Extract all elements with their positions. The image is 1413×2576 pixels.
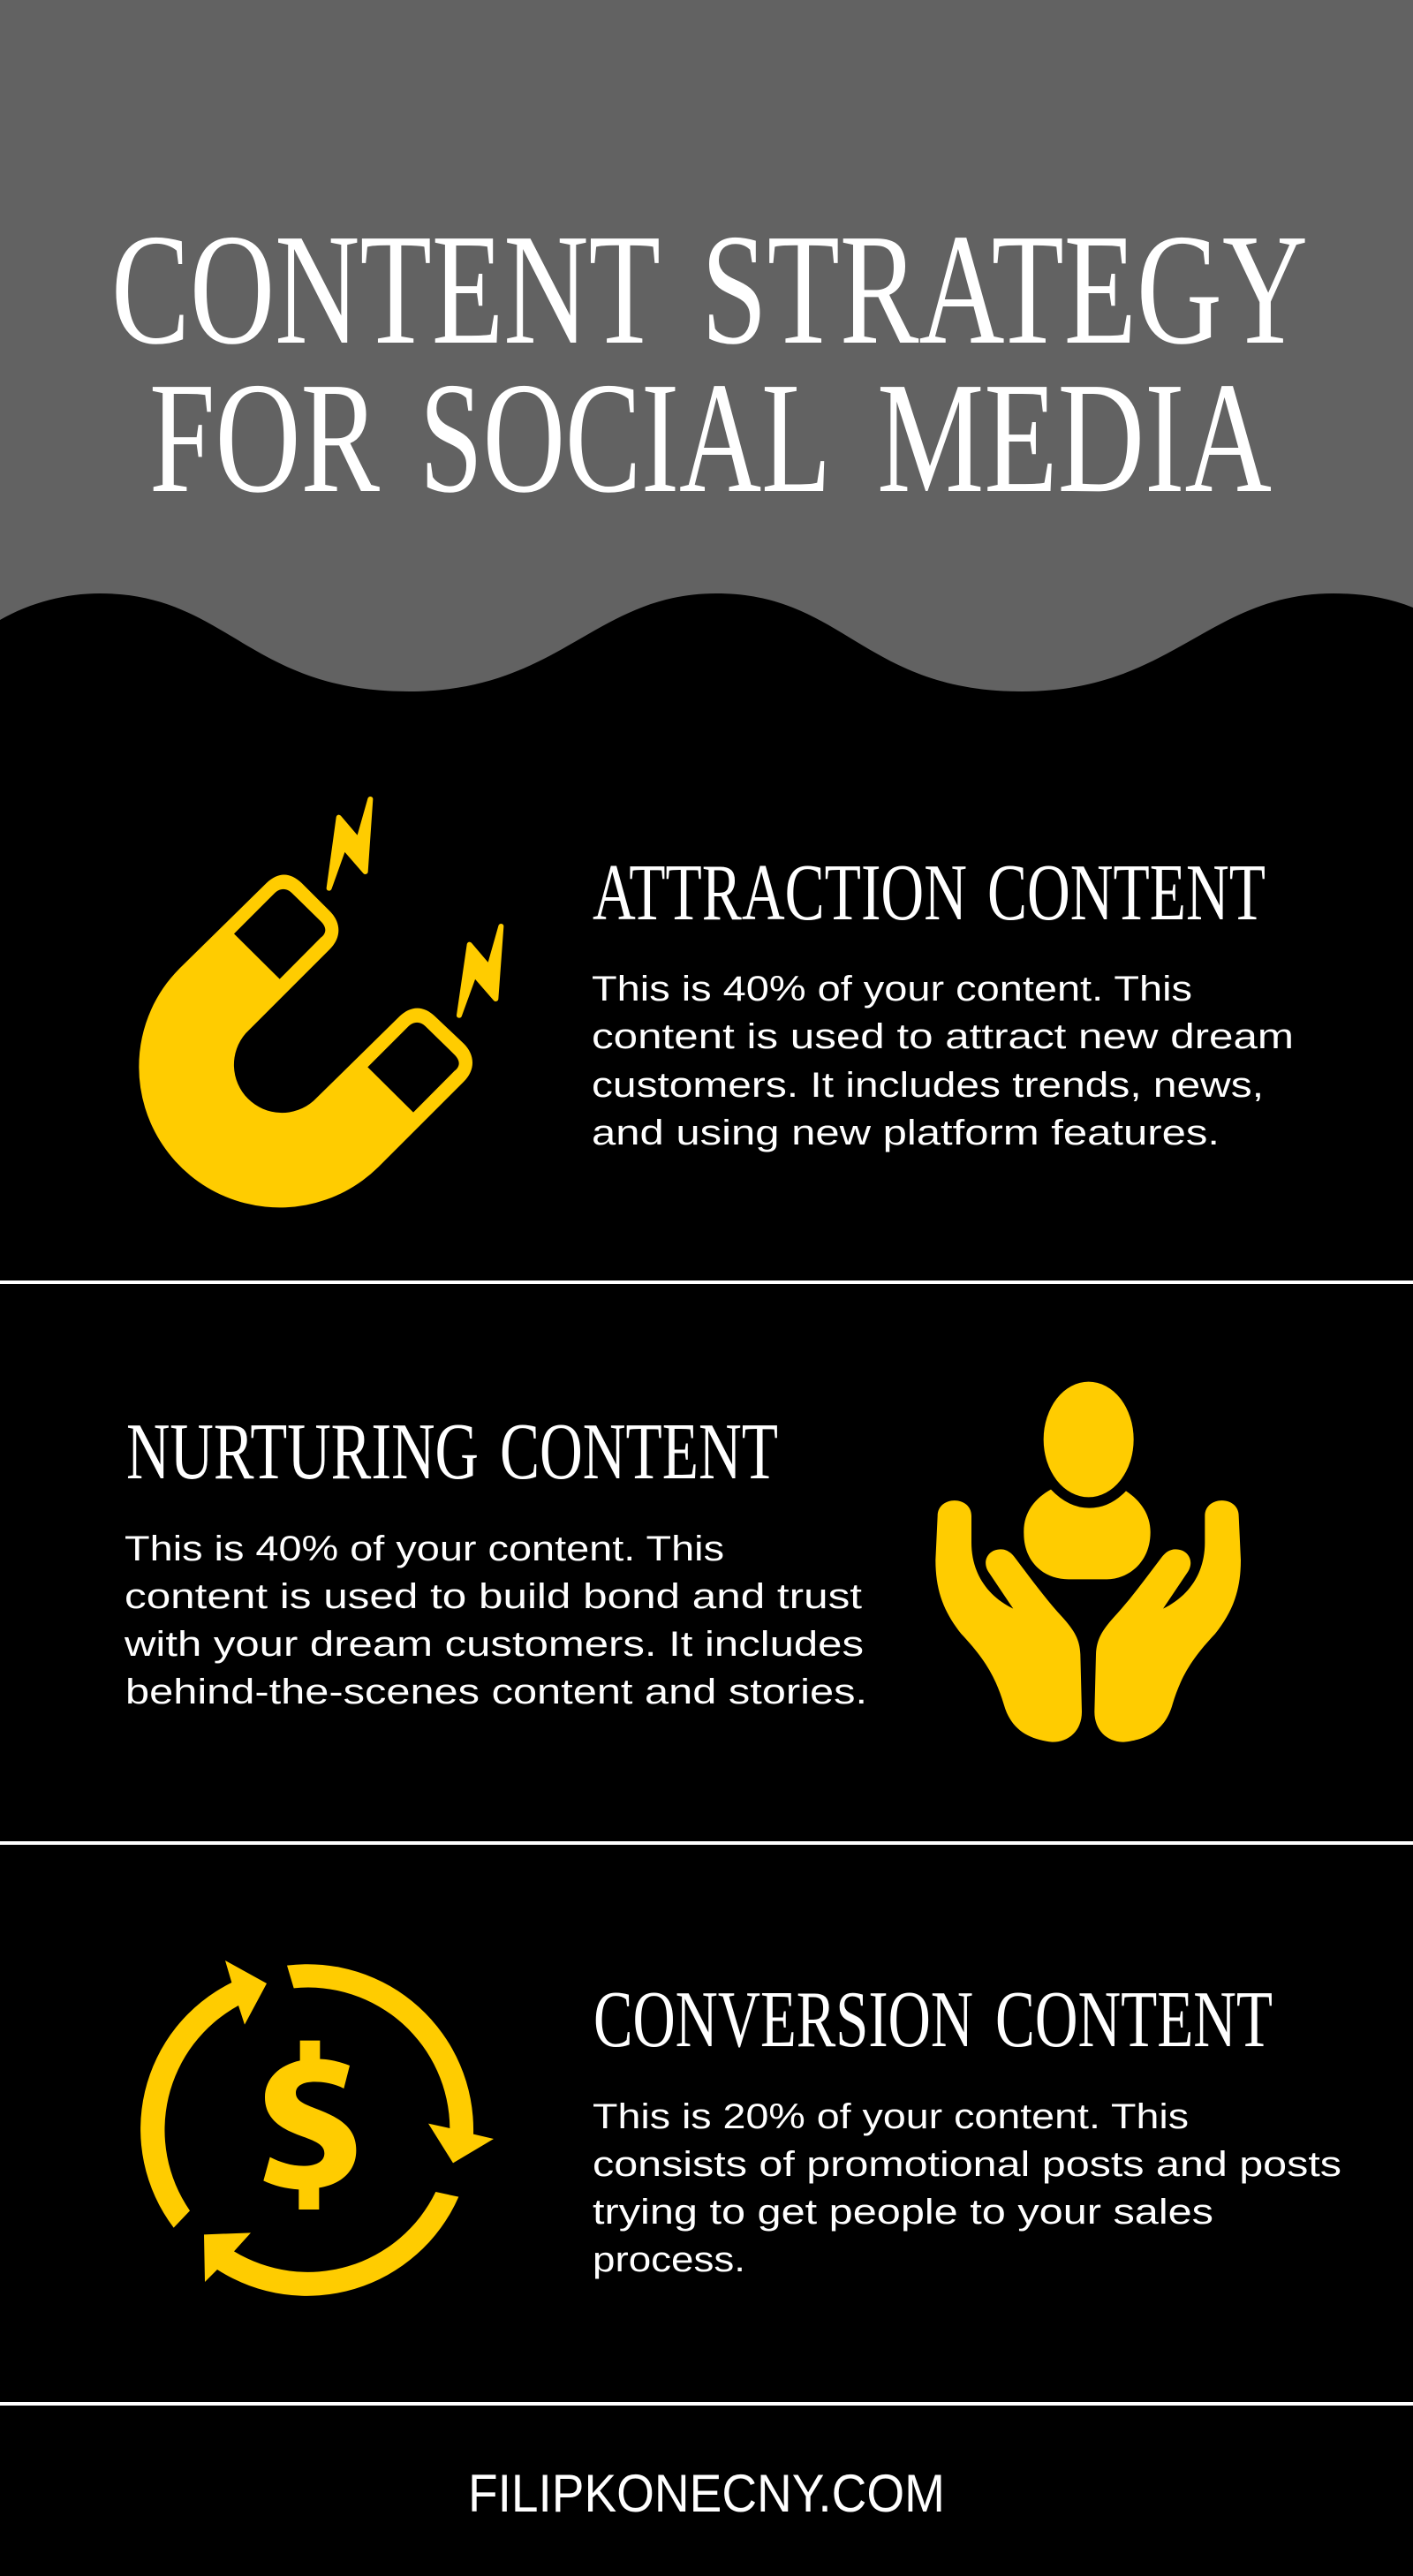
panel: nurturing content	[124, 1382, 1241, 1742]
heading: ATTRACTION	[593, 848, 967, 937]
body text: and using new platform features.	[592, 1114, 1220, 1152]
body text: customers. It includes trends, news,	[592, 1066, 1264, 1105]
icon: hands holding person	[935, 1382, 1241, 1742]
title: CONTENT	[111, 201, 661, 377]
header band	[0, 0, 1413, 706]
body text: This is 40% of your content. This	[125, 1530, 724, 1568]
body text: process.	[593, 2240, 745, 2279]
title: FOR	[149, 350, 380, 525]
heading: CONTENT	[500, 1407, 778, 1496]
body text: This is 20% of your content. This	[593, 2097, 1189, 2136]
body text	[593, 2097, 1341, 2279]
body text: with your dream customers. It includes	[124, 1625, 864, 1664]
wave edge of black background	[0, 593, 1413, 715]
heading: CONTENT	[995, 1975, 1273, 2064]
body text: behind-the-scenes content and stories.	[125, 1673, 867, 1711]
heading: CONTENT	[987, 848, 1266, 937]
body text: trying to get people to your sales	[593, 2193, 1213, 2232]
icon: money cycle	[140, 1960, 494, 2296]
heading: NURTURING	[126, 1407, 479, 1496]
title	[111, 201, 1308, 525]
body text: This is 40% of your content. This	[592, 970, 1192, 1008]
panel: attraction content	[139, 799, 1294, 1207]
icon: magnet	[139, 799, 501, 1207]
body text: content is used to attract new dream	[592, 1017, 1294, 1056]
title: SOCIAL	[419, 350, 831, 525]
panel: conversion content	[140, 1960, 1341, 2296]
heading: CONVERSION	[593, 1975, 973, 2064]
title: MEDIA	[877, 350, 1272, 525]
body text: content is used to build bond and trust	[125, 1577, 862, 1616]
body text	[124, 1530, 867, 1711]
body text: consists of promotional posts and posts	[593, 2145, 1341, 2184]
footer website: FILIPKONECNY.COM	[468, 2464, 945, 2523]
body text	[592, 970, 1294, 1152]
